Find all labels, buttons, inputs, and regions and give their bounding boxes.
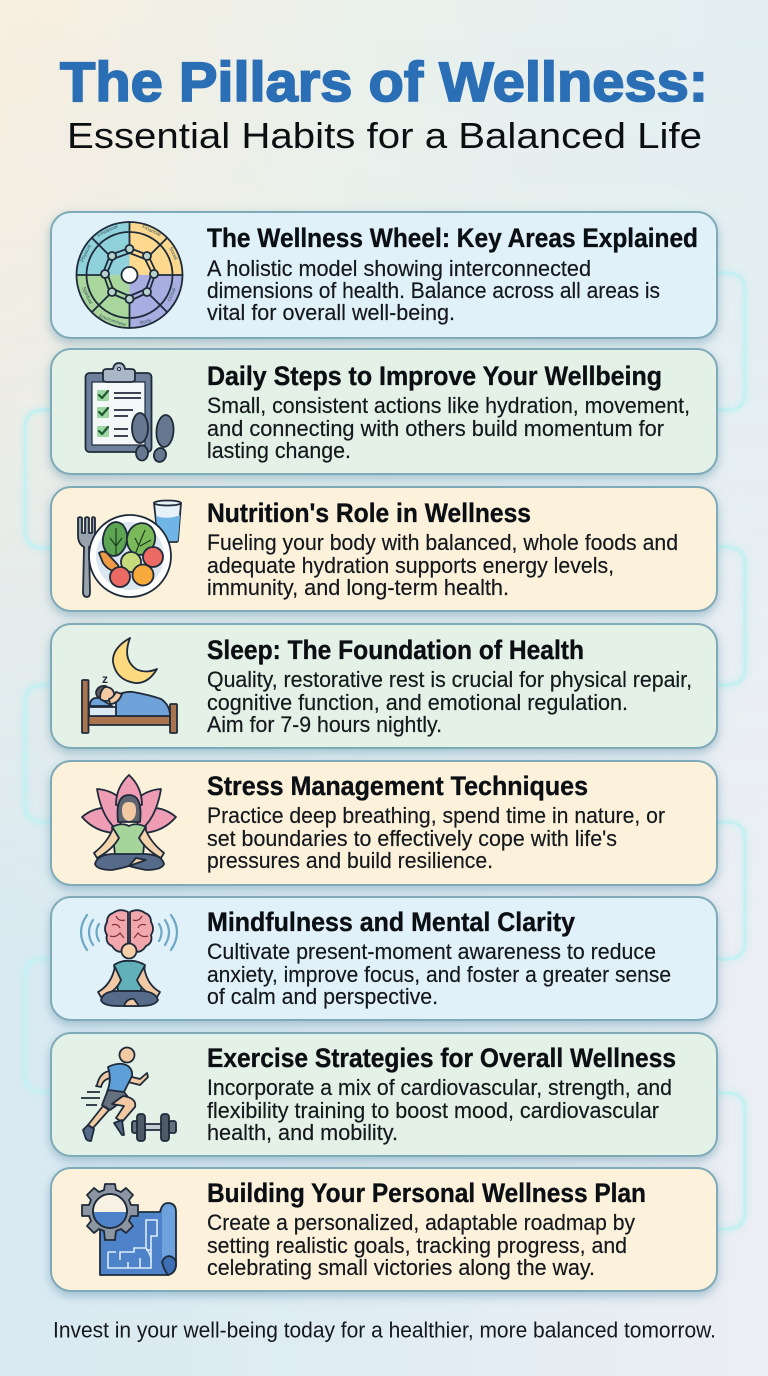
footer text: Invest in your well-being today for a healthier, more balanced tomorrow. <box>53 1318 716 1342</box>
text block: cognitive function, and emotional regulation. <box>207 690 628 715</box>
icon: wellness wheel: Body <box>139 318 152 326</box>
heading: Nutrition's Role in Wellness <box>207 498 531 528</box>
text block <box>207 803 665 873</box>
text block <box>207 393 690 463</box>
text block: flexibility training to boost mood, cardiovascular <box>207 1098 659 1123</box>
text block: vital for overall well-being. <box>207 300 455 325</box>
icon: plate, fork and glass <box>78 500 181 597</box>
text block: set boundaries to effectively cope with life's <box>207 826 617 851</box>
text block: Cultivate present-moment awareness to reduce <box>207 939 656 964</box>
text block: adequate hydration supports energy levels, <box>207 553 614 578</box>
icon: wellness wheel: Emotional <box>96 224 119 239</box>
icon: runner and dumbbell <box>81 1048 176 1141</box>
text block: dimensions of health. Balance across all areas is <box>207 278 660 303</box>
panel: stress management <box>51 761 717 885</box>
icon: wellness wheel: Physical <box>79 244 93 263</box>
text block: pressures and build resilience. <box>207 848 493 873</box>
icon: sleeping person and moon <box>82 638 177 733</box>
text block: Aim for 7-9 hours nightly. <box>207 712 442 737</box>
icon: wellness wheel: Environment <box>98 313 127 329</box>
text block <box>207 667 692 737</box>
icon: clipboard and footprints <box>86 363 175 463</box>
text block: Incorporate a mix of cardiovascular, strength, and <box>207 1075 672 1100</box>
text block <box>207 256 660 325</box>
panel: nutrition <box>51 487 717 611</box>
text block: immunity, and long-term health. <box>207 575 509 600</box>
icon: gear and blueprint <box>82 1184 176 1275</box>
text block: Create a personalized, adaptable roadmap by <box>207 1210 636 1235</box>
text block: of calm and perspective. <box>207 984 438 1009</box>
text block: Small, consistent actions like hydration, movement, <box>207 393 690 418</box>
icon: wellness wheel: Occup <box>167 287 177 302</box>
panel: wellness wheel <box>51 212 717 338</box>
icon: wellness wheel: Financial <box>141 224 162 238</box>
heading: Building Your Personal Wellness Plan <box>207 1178 646 1208</box>
connectors between cards <box>25 273 745 1229</box>
text block: lasting change. <box>207 438 351 463</box>
text block: A holistic model showing interconnected <box>207 256 591 281</box>
title <box>60 50 708 156</box>
panel: daily steps <box>51 349 717 474</box>
text block: and connecting with others build momentum for <box>207 416 664 441</box>
icon: meditating woman with lotus <box>82 775 176 870</box>
heading: The Wellness Wheel: Key Areas Explained <box>207 223 698 253</box>
text block: anxiety, improve focus, and foster a greater sense <box>207 962 671 987</box>
text block <box>207 1075 672 1145</box>
icon: wellness wheel: Spiritual <box>80 286 93 305</box>
heading: Exercise Strategies for Overall Wellness <box>207 1043 676 1073</box>
heading: Mindfulness and Mental Clarity <box>207 907 575 937</box>
icon: wellness wheel: Social <box>167 246 179 261</box>
icon: wellness wheel <box>76 222 184 329</box>
text block <box>207 939 671 1009</box>
text block: celebrating small victories along the way. <box>207 1255 595 1280</box>
text block: setting realistic goals, tracking progress, and <box>207 1233 627 1258</box>
text block: health, and mobility. <box>207 1120 398 1145</box>
panel: exercise <box>51 1033 717 1156</box>
text block <box>207 1210 636 1280</box>
text block: Quality, restorative rest is crucial for physical repair, <box>207 667 692 692</box>
text block: Fueling your body with balanced, whole foods and <box>207 530 678 555</box>
heading: Sleep: The Foundation of Health <box>207 635 584 665</box>
panel: mindfulness <box>51 897 717 1020</box>
panel: personal plan <box>51 1168 717 1291</box>
icon: sleeping person and moon: z <box>102 672 108 686</box>
panel: sleep <box>51 624 717 748</box>
heading: Stress Management Techniques <box>207 771 588 801</box>
heading: Daily Steps to Improve Your Wellbeing <box>207 361 662 391</box>
title: The Pillars of Wellness: <box>60 50 708 113</box>
text block: Practice deep breathing, spend time in nature, or <box>207 803 665 828</box>
subtitle: Essential Habits for a Balanced Life <box>67 115 702 156</box>
text block <box>207 530 678 600</box>
icon: meditating person with brain <box>81 910 177 1006</box>
